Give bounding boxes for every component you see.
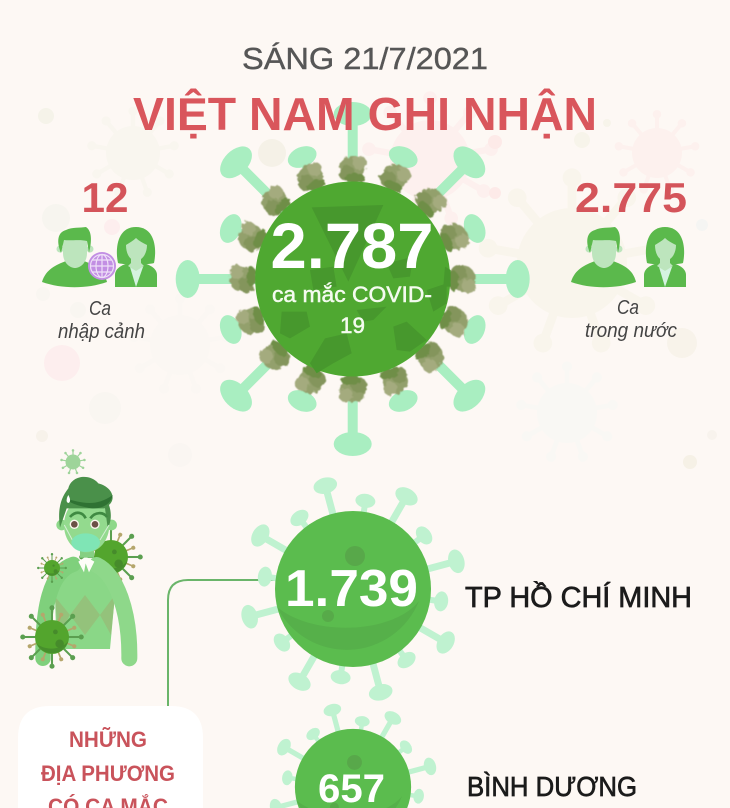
imported label bbox=[58, 298, 145, 343]
illustration: masked person with viruses bbox=[20, 449, 143, 669]
body bbox=[43, 551, 129, 658]
virus behind shoulder bbox=[79, 525, 143, 589]
virus: Binh Duong bbox=[268, 702, 438, 808]
domestic number: 2.775 bbox=[575, 174, 687, 221]
chest and hand viruses bbox=[37, 553, 67, 583]
virus body bbox=[255, 182, 450, 376]
panel: imported cases bbox=[42, 174, 157, 343]
headline: VIỆT NAM GHI NHẬN bbox=[133, 88, 597, 140]
total count bbox=[270, 210, 434, 338]
virus spikes bbox=[176, 102, 530, 456]
hair bbox=[59, 477, 113, 528]
domestic label bbox=[585, 297, 677, 342]
domestic label: Ca bbox=[617, 297, 639, 319]
panel: localities callout: ĐỊA PHƯƠNG bbox=[41, 761, 175, 786]
label: TP HCM: TP HỒ CHÍ MINH bbox=[465, 580, 692, 614]
panel: localities callout bbox=[18, 706, 203, 808]
icon: people bbox=[571, 227, 686, 287]
panel: localities callout: NHỮNG bbox=[69, 727, 147, 752]
dark patches on body bbox=[280, 205, 451, 373]
imported label: Ca bbox=[89, 298, 111, 320]
domestic label: trong nước bbox=[585, 320, 677, 342]
total count: ca mắc COVID- bbox=[272, 282, 432, 307]
imported number: 12 bbox=[82, 174, 128, 221]
total count: 2.787 bbox=[270, 210, 434, 282]
imported label: nhập cảnh bbox=[58, 321, 145, 343]
title: SÁNG 21/7/2021 bbox=[242, 41, 488, 76]
icon: people with globe bbox=[42, 227, 157, 287]
main virus graphic bbox=[176, 102, 530, 456]
HCMC value: 1.739 bbox=[285, 560, 418, 618]
head bbox=[56, 477, 117, 552]
face mask bbox=[64, 525, 109, 540]
panel: domestic cases bbox=[571, 174, 687, 342]
label: Binh Duong: BÌNH DƯƠNG bbox=[467, 771, 637, 802]
virus above head bbox=[60, 449, 86, 475]
total count: 19 bbox=[340, 313, 365, 338]
eyes bbox=[70, 513, 107, 518]
virus: TP HCM bbox=[239, 475, 467, 703]
connector line bbox=[168, 580, 276, 707]
brown spike clumps bbox=[230, 156, 476, 402]
faded background viruses and dots bbox=[36, 91, 717, 469]
